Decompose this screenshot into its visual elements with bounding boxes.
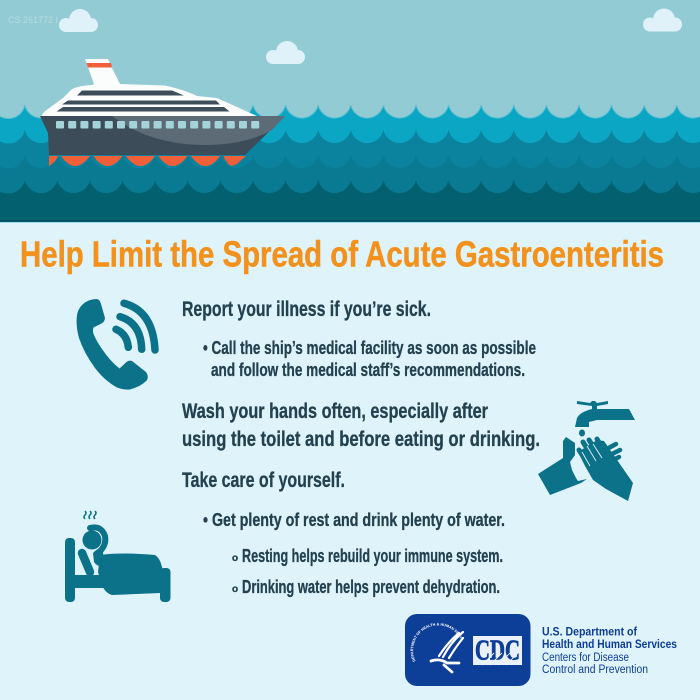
text: follow recommendations: and follow the medical staff’s recommendations. <box>211 360 525 380</box>
icon: sick person in bed <box>65 511 170 602</box>
text: department of: U.S. Department of <box>542 626 637 638</box>
lifeboats <box>49 156 246 166</box>
text: report illness: Report your illness if you’re sick. <box>182 298 431 321</box>
ship hull <box>40 116 285 155</box>
hull highlight <box>112 116 285 145</box>
bullet: resting: o <box>232 553 238 564</box>
wave layer 4 <box>0 180 700 222</box>
text: water prevents dehydration: Drinking water helps prevent dehydration. <box>242 577 500 597</box>
icon: telephone with sound waves <box>77 299 155 390</box>
cruise ship <box>40 59 285 166</box>
HHS ring text <box>413 625 461 661</box>
text: wash hands line 1: Wash your hands often, especially after <box>182 400 488 423</box>
logo: HHS and CDC: DEPARTMENT OF HEALTH & HUMAN SERVICES USA <box>410 622 462 662</box>
text: health and human services: Health and Human Services <box>542 639 677 651</box>
portholes <box>56 121 259 128</box>
icon: cloud left <box>59 9 98 32</box>
funnel stripe <box>86 63 112 68</box>
text: centers for disease: Centers for Disease <box>542 652 629 664</box>
text: rest and water: • Get plenty of rest and drink plenty of water. <box>203 510 505 530</box>
icon: cloud right <box>643 8 682 32</box>
text: take care: Take care of yourself. <box>182 469 345 492</box>
bullet: drinking: o <box>232 584 238 595</box>
wave layer 1 <box>0 105 700 222</box>
ship funnel and superstructure <box>41 59 258 116</box>
text: wash hands line 2: using the toilet and before eating or drinking. <box>182 428 540 451</box>
faint image id: CS 261772 I <box>8 15 58 25</box>
text: resting rebuilds immune system: Resting helps rebuild your immune system. <box>242 546 503 566</box>
text: control and prevention: Control and Prevention <box>542 664 648 676</box>
CDC badge: CDC <box>475 636 520 666</box>
panel: ocean scene header <box>0 0 700 222</box>
icon: cloud middle <box>266 41 305 64</box>
text: call medical facility: • Call the ship’s medical facility as soon as possible <box>203 338 536 358</box>
icon: faucet and washing hands <box>538 401 635 501</box>
wave layer 3 <box>0 155 700 222</box>
deck window strips <box>56 90 230 112</box>
logo: HHS and CDC <box>405 614 530 686</box>
HHS eagle <box>431 632 463 672</box>
wave layer 2 <box>0 130 700 222</box>
